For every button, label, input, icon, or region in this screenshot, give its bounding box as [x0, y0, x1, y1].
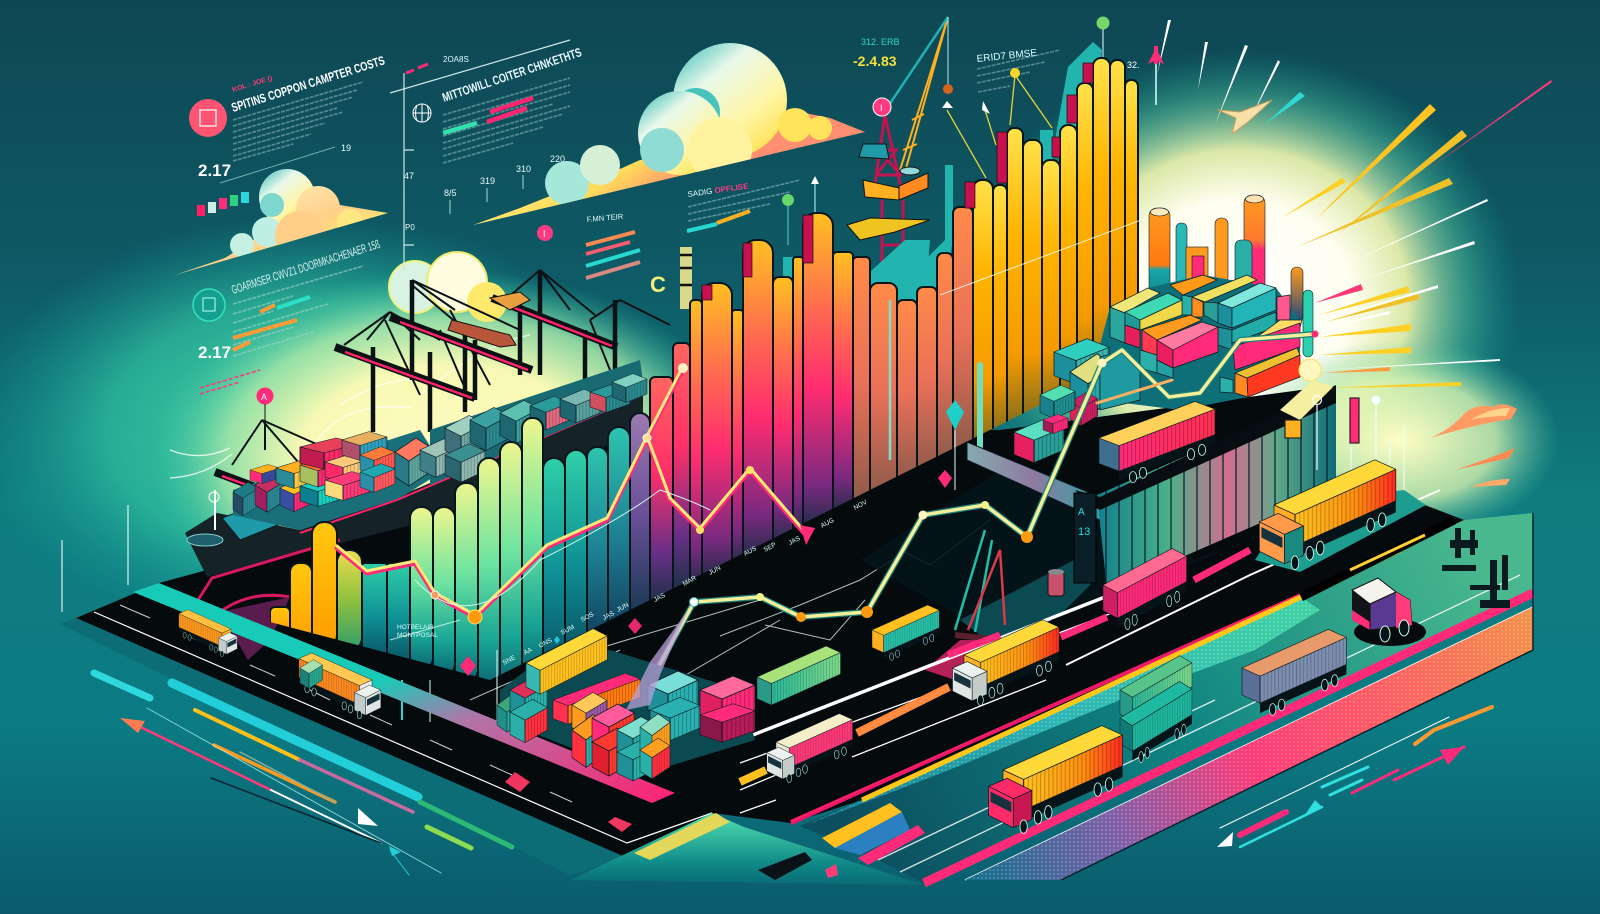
panel: mid text block: 8/5: [444, 188, 457, 198]
left truck: orange teal: [299, 653, 381, 719]
arrowheads left: [120, 718, 401, 856]
panel: shipping container costs: SPITINS COPPON CAMPTER COSTS: [230, 53, 386, 115]
doorway with A13 sign: A: [1078, 507, 1085, 518]
axis labels on chart base: MONTPOSAL: [397, 632, 438, 639]
panel: goarmser block: 2.17: [198, 343, 231, 362]
crane bridge detail: [448, 292, 530, 347]
pink floor glow: [925, 640, 1005, 680]
floor lines: [390, 520, 990, 705]
panel: sadig block: F.MN TEIR: [586, 212, 624, 224]
panel: mid text block: P0: [405, 223, 415, 232]
gradient band: [965, 607, 1533, 880]
axis labels on chart base: HOTBELAIR: [397, 624, 434, 631]
truck: pink big on top: [1099, 401, 1215, 483]
truck: yellow red with pink cab: [989, 726, 1122, 833]
cloud: large infographic cloud: [473, 43, 865, 240]
left truck teal rear: [300, 660, 322, 688]
axis labels on chart base: AA: [523, 646, 534, 657]
annotation text and pins: 312. ERB: [861, 37, 900, 47]
dark floor right of chart: [860, 470, 1250, 650]
ship containers colorful: [233, 430, 445, 530]
arrowheads right: [1217, 747, 1464, 847]
colour patch: [822, 803, 925, 865]
ship bridge: [222, 502, 290, 540]
big line chart: [337, 334, 1315, 704]
axis labels on chart base: SNE: [502, 654, 517, 667]
truck: yellow orange: [953, 620, 1059, 705]
axis labels on chart base: JUN: [616, 602, 630, 614]
panel: sadig block: [586, 180, 800, 278]
legend squares: [197, 192, 249, 216]
container stack: left: [497, 629, 755, 781]
crane tower: [847, 17, 953, 262]
lower-left arrows: [94, 673, 512, 875]
annotation text and pins: C: [650, 272, 666, 297]
panel: mid text block: 319: [480, 176, 495, 186]
truck: grey flatbed: [1242, 629, 1346, 715]
crane booms: [222, 303, 612, 500]
axis labels on chart base: JAS: [788, 535, 802, 547]
panel: shipping container costs: [189, 40, 570, 270]
machinery right: [1442, 528, 1510, 608]
cloud: behind cranes: [389, 252, 507, 322]
left fence and wisps: [62, 335, 530, 612]
cylinder bars: [1149, 195, 1313, 357]
black steps: [758, 852, 812, 880]
panel: mid text block: 220: [550, 154, 565, 164]
panel: mid text block: [404, 45, 583, 232]
axis labels on chart base: AUG: [820, 517, 835, 530]
axis labels on chart base: SUM: [560, 624, 576, 637]
axis labels on chart base: [397, 499, 869, 667]
panel divider ticks: [390, 40, 570, 270]
truck: green teal stacked: [1120, 656, 1192, 763]
panel: mid text block: 47: [404, 171, 414, 181]
panel: shipping container costs: 19: [341, 143, 351, 153]
bar chart: [270, 58, 1138, 687]
axis labels on chart base: JAS: [602, 610, 616, 622]
panel: goarmser block: GOARMSER CWVZ1 DOORMKACHENAER 15ß: [230, 237, 382, 297]
pin: crane: [873, 98, 891, 116]
lower-right arrows: [1220, 707, 1492, 847]
ribbed wall: [1075, 385, 1336, 590]
pink edge: [924, 593, 1533, 883]
truck: green container: [757, 646, 841, 705]
dotted band: [806, 597, 1320, 825]
ship containers teal: [420, 360, 647, 485]
ship hull: [185, 393, 643, 577]
arrow: pink upward: [1148, 46, 1164, 105]
truck: white pink: [767, 714, 853, 783]
annotation text and pins: ERID7 BMSE: [976, 48, 1038, 65]
annotation text and pins: [537, 16, 1140, 309]
panel: sadig block: SADIG OPFLISE: [687, 181, 750, 199]
ship: [185, 360, 647, 660]
pin: crane: I: [880, 103, 883, 113]
doorway with A13 sign: [1074, 493, 1096, 583]
lower-right teal floor: [570, 813, 924, 885]
rays burst: [1157, 20, 1552, 388]
icon: price tag circle: [189, 99, 227, 137]
teal slab under top truck: [1255, 490, 1426, 572]
axis labels on chart base: MAR: [682, 575, 698, 588]
line origin from containers: [626, 602, 694, 710]
platform black base: [60, 388, 1464, 875]
road marker pins: [505, 772, 530, 792]
panel: mid text block: 310: [516, 164, 531, 174]
ship cranes: [215, 270, 670, 500]
axis labels on chart base: AUS: [743, 545, 758, 558]
pin: ship: [256, 388, 274, 420]
pin: red i: I: [543, 229, 546, 239]
panel: mid text block: MITTOWILL COITER CHNKETHTS: [441, 45, 583, 105]
panel: goarmser block: [193, 237, 382, 394]
truck: white black van: [1352, 578, 1426, 646]
right clouds: [1430, 404, 1517, 487]
pin: ship: A: [261, 392, 267, 402]
bar side faces: [702, 63, 1093, 300]
axis labels on chart base: ONS: [538, 637, 554, 650]
doorway with A13 sign: 13: [1078, 526, 1090, 538]
icon: globe: [413, 104, 431, 122]
lower road and band: [758, 513, 1533, 883]
bucket: [1048, 569, 1064, 596]
chart nodes: [431, 330, 1321, 624]
lamp posts and signs: [1285, 396, 1404, 495]
truck: top right: [1259, 460, 1396, 570]
axis labels on chart base: JUN: [708, 565, 722, 577]
panel: shipping container costs: 2.17: [198, 161, 231, 180]
axis labels on chart base: SOS: [580, 611, 596, 624]
axis labels on chart base: SEP: [763, 541, 777, 554]
thin trend line on bars: [940, 213, 1160, 295]
axis labels on chart base: JAS: [653, 592, 667, 604]
truck: pink trailer: [1103, 548, 1187, 630]
grey beam: [967, 442, 1100, 520]
icon: green circle: [193, 289, 225, 321]
ladder machine: [955, 530, 1005, 640]
teal vertical marker: [977, 362, 983, 457]
container stack: right: [1014, 275, 1333, 463]
pin: red i: [537, 225, 553, 241]
annotation text and pins: -2.4.83: [853, 53, 897, 69]
upper road lanes: [740, 490, 1440, 822]
axis labels on chart base: NOV: [853, 499, 869, 512]
platform strip and left road: [94, 583, 712, 843]
chart markers: [402, 300, 964, 725]
left truck: orange: [179, 610, 237, 657]
panel: mid text block: 2OA8S: [443, 55, 469, 64]
tower stack: [680, 247, 692, 309]
annotation text and pins: 32.: [1127, 60, 1140, 70]
icon: bird: [1218, 100, 1272, 134]
cloud: small infographic cloud: [175, 169, 388, 275]
truck: small yellow teal container: [872, 605, 939, 660]
panel: shipping container costs: KOL : JOE (): [232, 75, 273, 94]
teal back shapes: [783, 42, 1102, 315]
